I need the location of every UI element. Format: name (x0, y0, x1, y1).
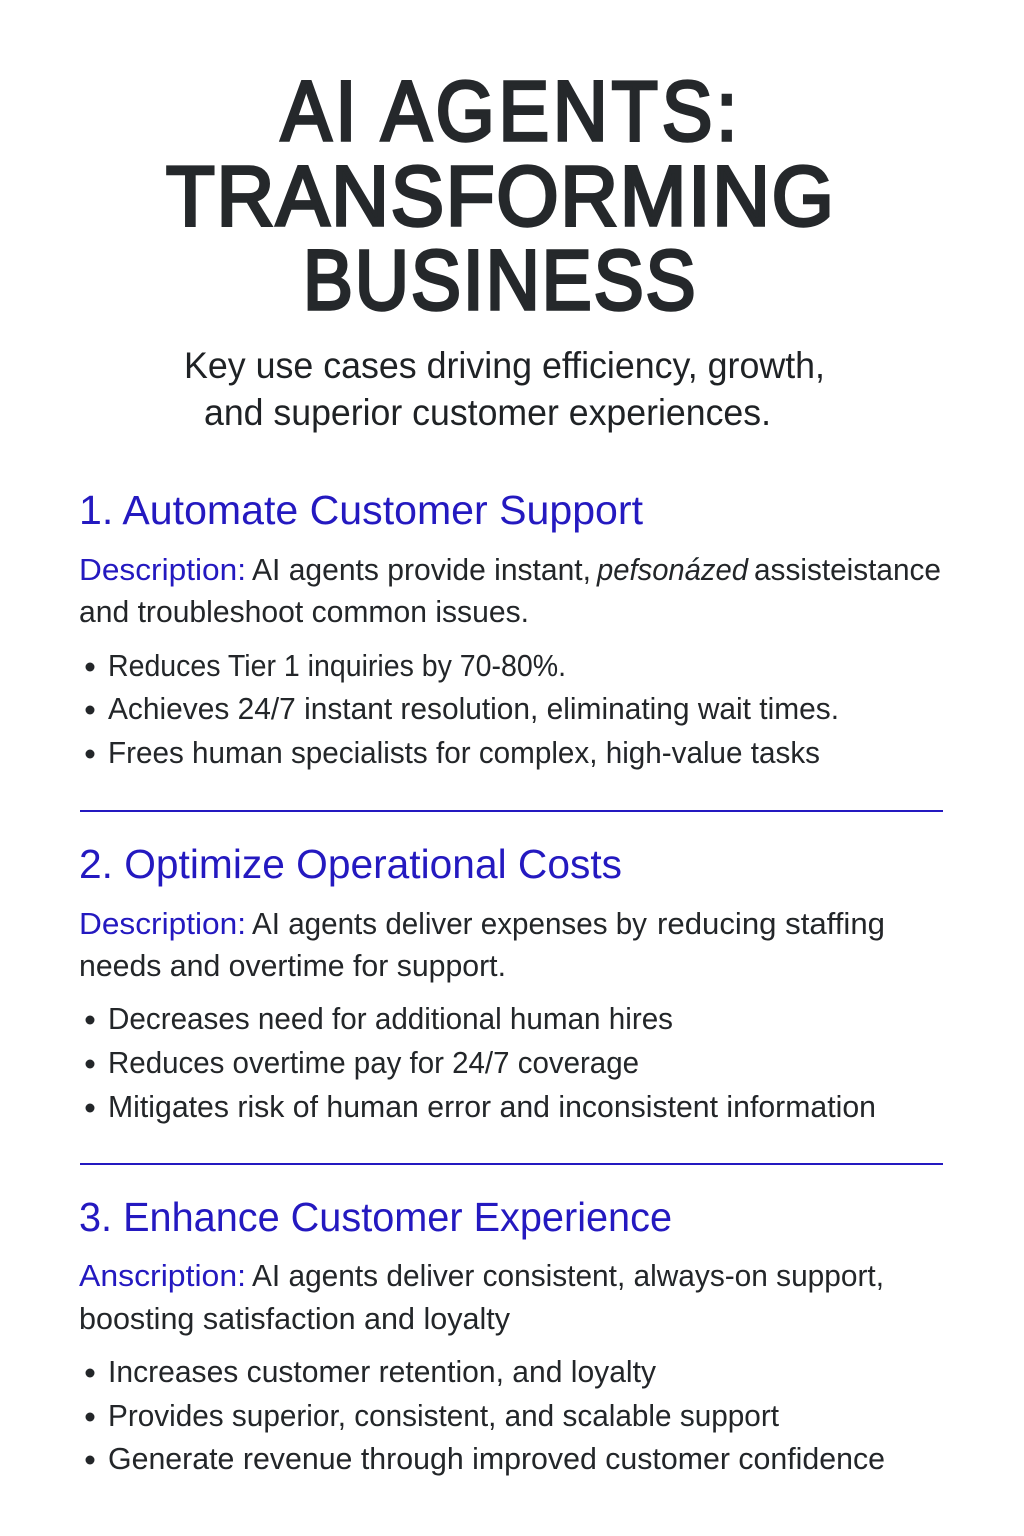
panel: section 2 optimize operational costs (79, 841, 885, 1124)
text block: section 2 description: Description: (79, 906, 246, 941)
subtitle (184, 345, 825, 433)
text block: section 3 description (79, 1258, 884, 1336)
text block: section 2 description: AI agents deliver expenses by (252, 906, 647, 941)
list: section 3 bullets: Generate revenue through improved customer confidence (108, 1441, 885, 1476)
heading: section 3: 3. Enhance Customer Experience (79, 1194, 672, 1240)
text block: section 1 description: assisteistance (754, 552, 941, 587)
text block: section 1 description (79, 552, 941, 629)
text block: section 1 description: Description: (79, 552, 246, 587)
title: BUSINESS (303, 233, 695, 327)
list: section 2 bullets (86, 1001, 876, 1124)
list: section 1 bullets: Frees human specialists for complex, high-value tasks (108, 735, 820, 770)
list: section 2 bullets: Decreases need for additional human hires (108, 1001, 673, 1036)
list: section 3 bullets (86, 1354, 885, 1476)
title (166, 64, 834, 327)
list: section 2 bullets: Reduces overtime pay for 24/7 coverage (108, 1045, 639, 1080)
text block: section 2 description (79, 906, 885, 983)
text block: section 3 description: boosting satisfaction and loyalty (79, 1301, 510, 1336)
text block: section 3 description: AI agents deliver consistent, always-on support, (252, 1258, 884, 1293)
text block: section 1 description: AI agents provide instant, (252, 552, 591, 587)
list: section 1 bullets: Reduces Tier 1 inquiries by 70-80%. (108, 648, 566, 683)
list: section 2 bullets: Mitigates risk of human error and inconsistent information (108, 1089, 876, 1124)
text block: section 1 description: and troubleshoot common issues. (79, 594, 529, 629)
list: section 3 bullets: Provides superior, consistent, and scalable support (108, 1398, 779, 1433)
panel: section 1 automate customer support (79, 487, 941, 770)
list: section 1 bullets (86, 648, 839, 770)
heading: section 1: 1. Automate Customer Support (79, 487, 644, 533)
subtitle: and superior customer experiences. (204, 392, 771, 433)
subtitle: Key use cases driving efficiency, growth, (184, 345, 825, 386)
text block: section 1 description: pefsonázed (596, 552, 750, 587)
list: section 3 bullets: Increases customer retention, and loyalty (108, 1354, 656, 1389)
title: AI AGENTS: (281, 64, 737, 158)
list: section 1 bullets: Achieves 24/7 instant resolution, eliminating wait times. (108, 691, 839, 726)
text block: section 2 description: needs and overtime for support. (79, 948, 506, 983)
heading: section 2: 2. Optimize Operational Costs (79, 841, 622, 887)
text block: section 2 description: reducing staffing (657, 906, 885, 941)
title: TRANSFORMING (166, 150, 834, 243)
text block: section 3 description: Anscription: (79, 1258, 246, 1293)
panel: section 3 enhance customer experience (79, 1194, 885, 1476)
